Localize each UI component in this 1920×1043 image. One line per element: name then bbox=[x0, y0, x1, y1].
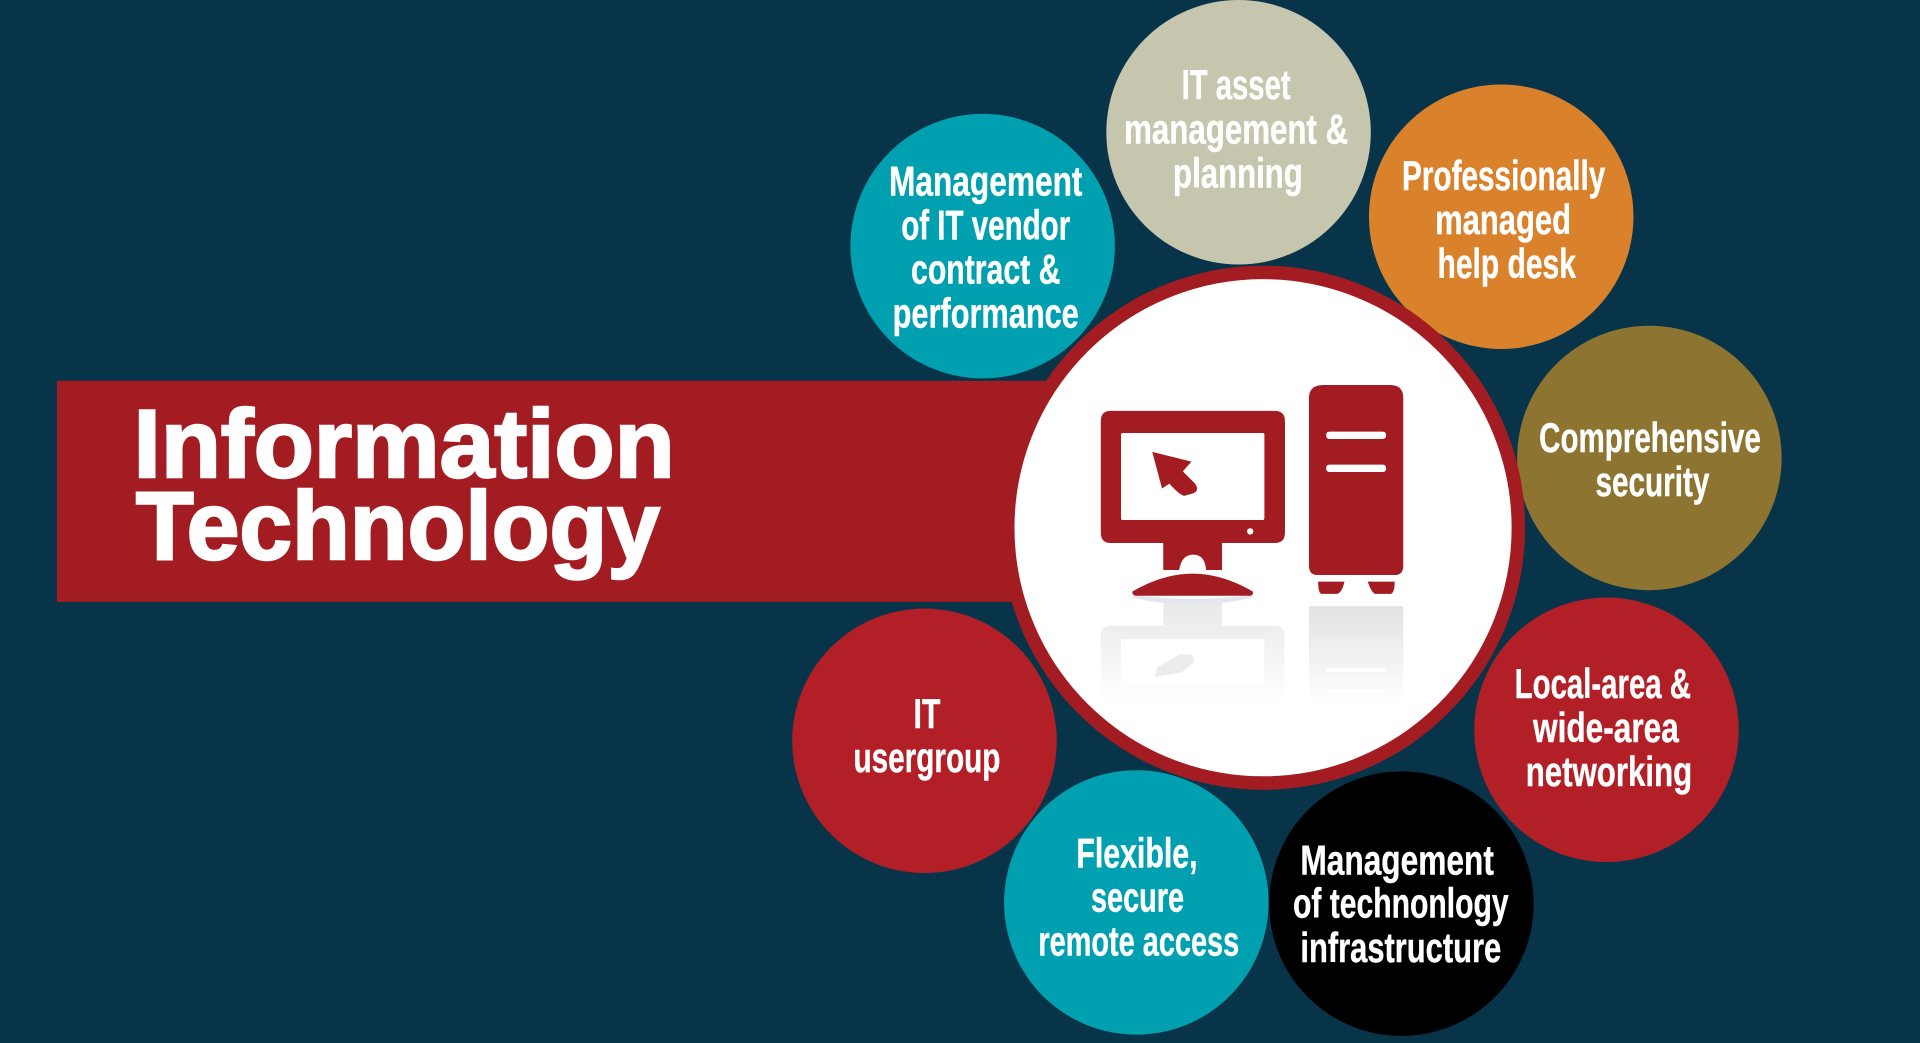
bubble: remote access bbox=[1004, 770, 1269, 1035]
icon: tower feet bbox=[1318, 582, 1395, 594]
bubble: remote access: Flexible, bbox=[1076, 830, 1198, 877]
bubble: asset management bbox=[1106, 0, 1371, 264]
title banner bbox=[57, 381, 1061, 602]
icon: power light bbox=[1247, 528, 1253, 535]
bubble: infrastructure: Management bbox=[1300, 836, 1494, 883]
bubble: asset management: planning bbox=[1173, 149, 1303, 196]
bubble: help desk bbox=[1369, 84, 1633, 349]
title bbox=[133, 390, 675, 580]
bubble: asset management: IT asset bbox=[1182, 61, 1291, 108]
bubble: vendor management bbox=[850, 114, 1115, 378]
icon: cursor bbox=[1152, 452, 1197, 496]
bubble: user group: IT bbox=[913, 690, 941, 737]
bubble: vendor management: contract & bbox=[911, 245, 1060, 292]
icon: base bbox=[1132, 574, 1253, 596]
icon: stand bbox=[1163, 543, 1222, 570]
bubble: infrastructure: infrastructure bbox=[1300, 924, 1501, 971]
bubble: infrastructure: of technonlogy bbox=[1293, 880, 1509, 927]
central circle bbox=[1008, 272, 1518, 783]
icon: computer tower bbox=[1309, 385, 1403, 594]
bubble: user group bbox=[792, 609, 1057, 873]
bubble: help desk: help desk bbox=[1438, 240, 1576, 287]
icon: monitor bbox=[1101, 411, 1285, 596]
bubble: remote access: remote access bbox=[1038, 918, 1239, 965]
bubble: user group: usergroup bbox=[853, 734, 1000, 781]
bubble: infrastructure bbox=[1269, 771, 1534, 1036]
bubble: vendor management: performance bbox=[893, 290, 1079, 337]
bubble: networking bbox=[1474, 598, 1739, 862]
bubble: networking: networking bbox=[1526, 748, 1692, 795]
bubble: security: security bbox=[1595, 458, 1710, 505]
bubble: help desk: Professionally bbox=[1402, 152, 1606, 199]
bubble: networking: wide-area bbox=[1532, 704, 1679, 751]
bubble: asset management: management & bbox=[1124, 105, 1348, 152]
bubble: security: Comprehensive bbox=[1539, 414, 1761, 461]
bubble: vendor management: of IT vendor bbox=[901, 201, 1070, 248]
bubble: vendor management: Management bbox=[889, 157, 1082, 204]
title: Information bbox=[133, 390, 675, 498]
icon: reflection bbox=[1101, 595, 1403, 700]
bubble: remote access: secure bbox=[1091, 874, 1184, 921]
bubble: networking: Local-area & bbox=[1515, 660, 1691, 707]
bubble: security bbox=[1517, 326, 1782, 590]
title: Technology bbox=[136, 472, 660, 580]
bubble: help desk: managed bbox=[1435, 196, 1571, 243]
